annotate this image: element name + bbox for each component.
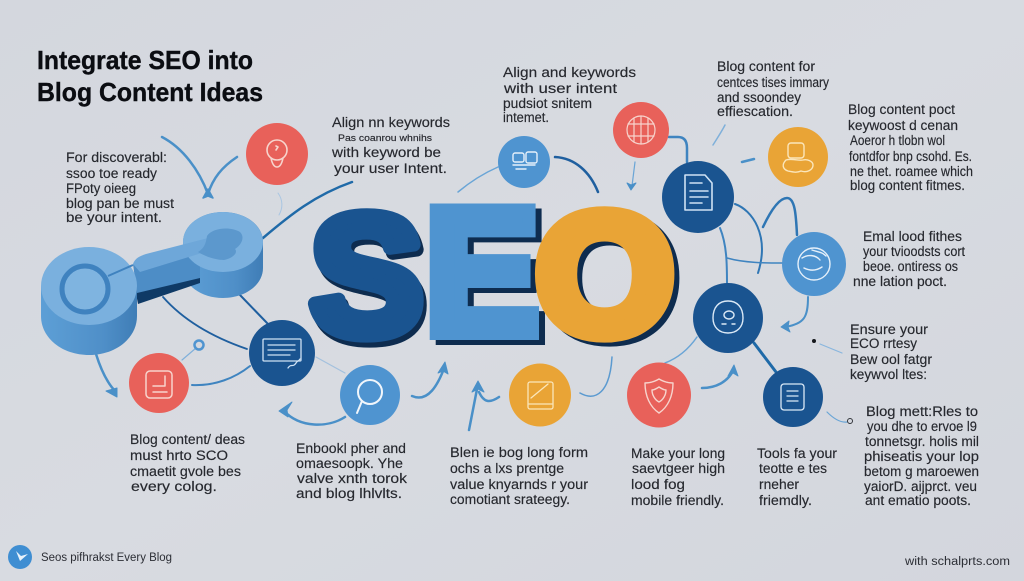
icon: dark document	[662, 161, 734, 233]
text block: make your long: saevtgeer high	[632, 461, 725, 476]
title	[37, 45, 263, 107]
text block: embed: omaesoopk. Yhe	[296, 456, 403, 471]
text block: align keywords left	[331, 115, 450, 176]
text block: discoverable	[66, 150, 174, 225]
text block: blog content ideas: every colog.	[131, 479, 217, 494]
text block: blog content ideas: cmaetit gvole bes	[130, 464, 241, 479]
text block: blog content post: ne thet. roamee which	[850, 164, 973, 179]
icon: red shield	[627, 362, 691, 428]
text block: blend long form: value knyarnds r your	[450, 477, 589, 492]
small ring node	[194, 340, 204, 350]
text block: email load: nne lation poct.	[853, 274, 947, 289]
text block: align keywords left: your user Intent.	[334, 161, 447, 176]
letter S shadow: S	[313, 186, 426, 376]
text block: blend long form: ochs a lxs prentge	[450, 461, 564, 476]
text block: align keywords top: intemet.	[503, 110, 549, 125]
text block: tools: teotte e tes	[759, 461, 827, 476]
icon: orange tablet	[509, 364, 571, 426]
text block: blog content post: Blog content poct	[848, 102, 955, 117]
letter E shadow: E	[431, 177, 545, 376]
text block: blog metrics	[864, 404, 979, 508]
text block: align keywords top: with user intent	[503, 81, 617, 96]
icon: red brain	[613, 102, 669, 158]
text block: blend long form: comotiant srateegy.	[450, 492, 570, 507]
connector lines	[96, 125, 847, 430]
text block: blog metrics: yaiorD. aijprct. veu	[864, 479, 977, 494]
text block: discoverable: be your intent.	[66, 210, 162, 225]
text block: embed: and blog lhlvlts.	[296, 486, 402, 501]
text block: align keywords top: pudsiot snitem	[503, 96, 592, 111]
letter O: O	[536, 179, 674, 369]
icon: connected hub key graphic	[41, 212, 263, 355]
text block: make your long	[631, 446, 725, 508]
footer: logo icon	[8, 545, 32, 569]
text block: align keywords top: Align and keywords	[503, 65, 636, 80]
title: Blog Content Ideas	[37, 77, 263, 107]
text block: make your long: mobile friendly.	[631, 493, 724, 508]
text block: blog metrics: betom g maroewen	[864, 464, 979, 479]
text block: blog content post: fontdfor bnp csohd. Es.	[849, 149, 972, 164]
icon: red square	[129, 353, 189, 413]
text block: blog content post: blog content fitmes.	[850, 178, 965, 193]
text block: blog metrics: tonnetsgr. holis mil	[865, 434, 979, 449]
text block: blend long form: Blen ie bog long form	[450, 445, 588, 460]
letter E: E	[425, 172, 539, 371]
text block: ensure your SEO: keywvol ltes:	[850, 367, 927, 382]
text block: discoverable: For discoverabl:	[66, 150, 167, 165]
text block: blog content primary: and ssoondey	[717, 90, 801, 105]
text block: email load: beoe. ontiress os	[863, 259, 958, 274]
text block: align keywords left: Align nn keywords	[332, 115, 450, 130]
letter O shadow: O	[541, 183, 679, 373]
text block: blog content primary: Blog content for	[717, 59, 816, 74]
text block: align keywords left: with keyword be	[331, 145, 441, 160]
text block: discoverable: FPoty oieeg	[66, 181, 136, 196]
icon: red bulb	[246, 123, 308, 185]
text block: email load	[853, 229, 965, 289]
text block: discoverable: ssoo toe ready	[66, 166, 157, 181]
text block: email load: Emal lood fithes	[863, 229, 962, 244]
text block: discoverable: blog pan be must	[66, 196, 174, 211]
text block: tools	[757, 446, 838, 508]
text block: tools: Tools fa your	[757, 446, 838, 461]
text block: blog content primary: effiescation.	[717, 104, 793, 119]
text block: embed: valve xnth torok	[297, 471, 407, 486]
icon: blue globe	[782, 232, 846, 296]
text block: tools: friemdly.	[759, 493, 812, 508]
small ring node right	[848, 418, 852, 424]
title: Integrate SEO into	[37, 45, 253, 75]
footer: left caption: Seos pifhrakst Every Blog	[41, 552, 172, 564]
text block: ensure your SEO: Bew ool fatgr	[850, 352, 933, 367]
text block: email load: your tvioodsts cort	[863, 244, 965, 259]
icon: blue folder	[498, 136, 550, 188]
text block: embed	[296, 441, 407, 501]
small dot	[812, 339, 816, 343]
icon: blue magnifier	[340, 365, 400, 425]
icon: dark browser card	[249, 320, 315, 386]
text block: align keywords top	[503, 65, 636, 125]
text block: blog content post: Aoeror h tlobn wol	[850, 133, 945, 148]
text block: align keywords left: Pas coanrou whnihs	[338, 133, 433, 143]
text block: make your long: lood fog	[631, 477, 685, 492]
text block: ensure your SEO	[850, 322, 933, 382]
text block: blog content post	[848, 102, 973, 193]
text block: ensure your SEO: Ensure your	[850, 322, 929, 337]
text block: blog content ideas	[130, 432, 245, 494]
text block: blog content ideas: must hrto SCO	[130, 448, 228, 463]
footer: website: with schalprts.com	[904, 556, 1010, 568]
text block: tools: rneher	[759, 477, 800, 492]
text block: blog metrics: Blog mett:Rles to	[866, 404, 978, 419]
text block: blog content ideas: Blog content/ deas	[130, 432, 245, 447]
text block: blog content primary	[717, 59, 829, 119]
text block: embed: Enbookl pher and	[296, 441, 406, 456]
text block: blog content post: keywoost d cenan	[848, 118, 958, 133]
icon: dark tablet	[763, 367, 823, 427]
icon: dark face	[693, 283, 763, 353]
text block: make your long: Make your long	[631, 446, 725, 461]
text block: ensure your SEO: ECO rrtesy	[850, 336, 917, 351]
text block: blog metrics: phiseatis your lop	[864, 449, 979, 464]
text block: blog metrics: ant ematio poots.	[865, 493, 971, 508]
icon: orange hands	[768, 127, 828, 187]
text block: blog content primary: centces tises immary	[717, 75, 829, 90]
letter S: S	[310, 181, 423, 371]
text block: blog metrics: you dhe to ervoe l9	[867, 419, 977, 434]
text block: blend long form	[450, 445, 589, 507]
